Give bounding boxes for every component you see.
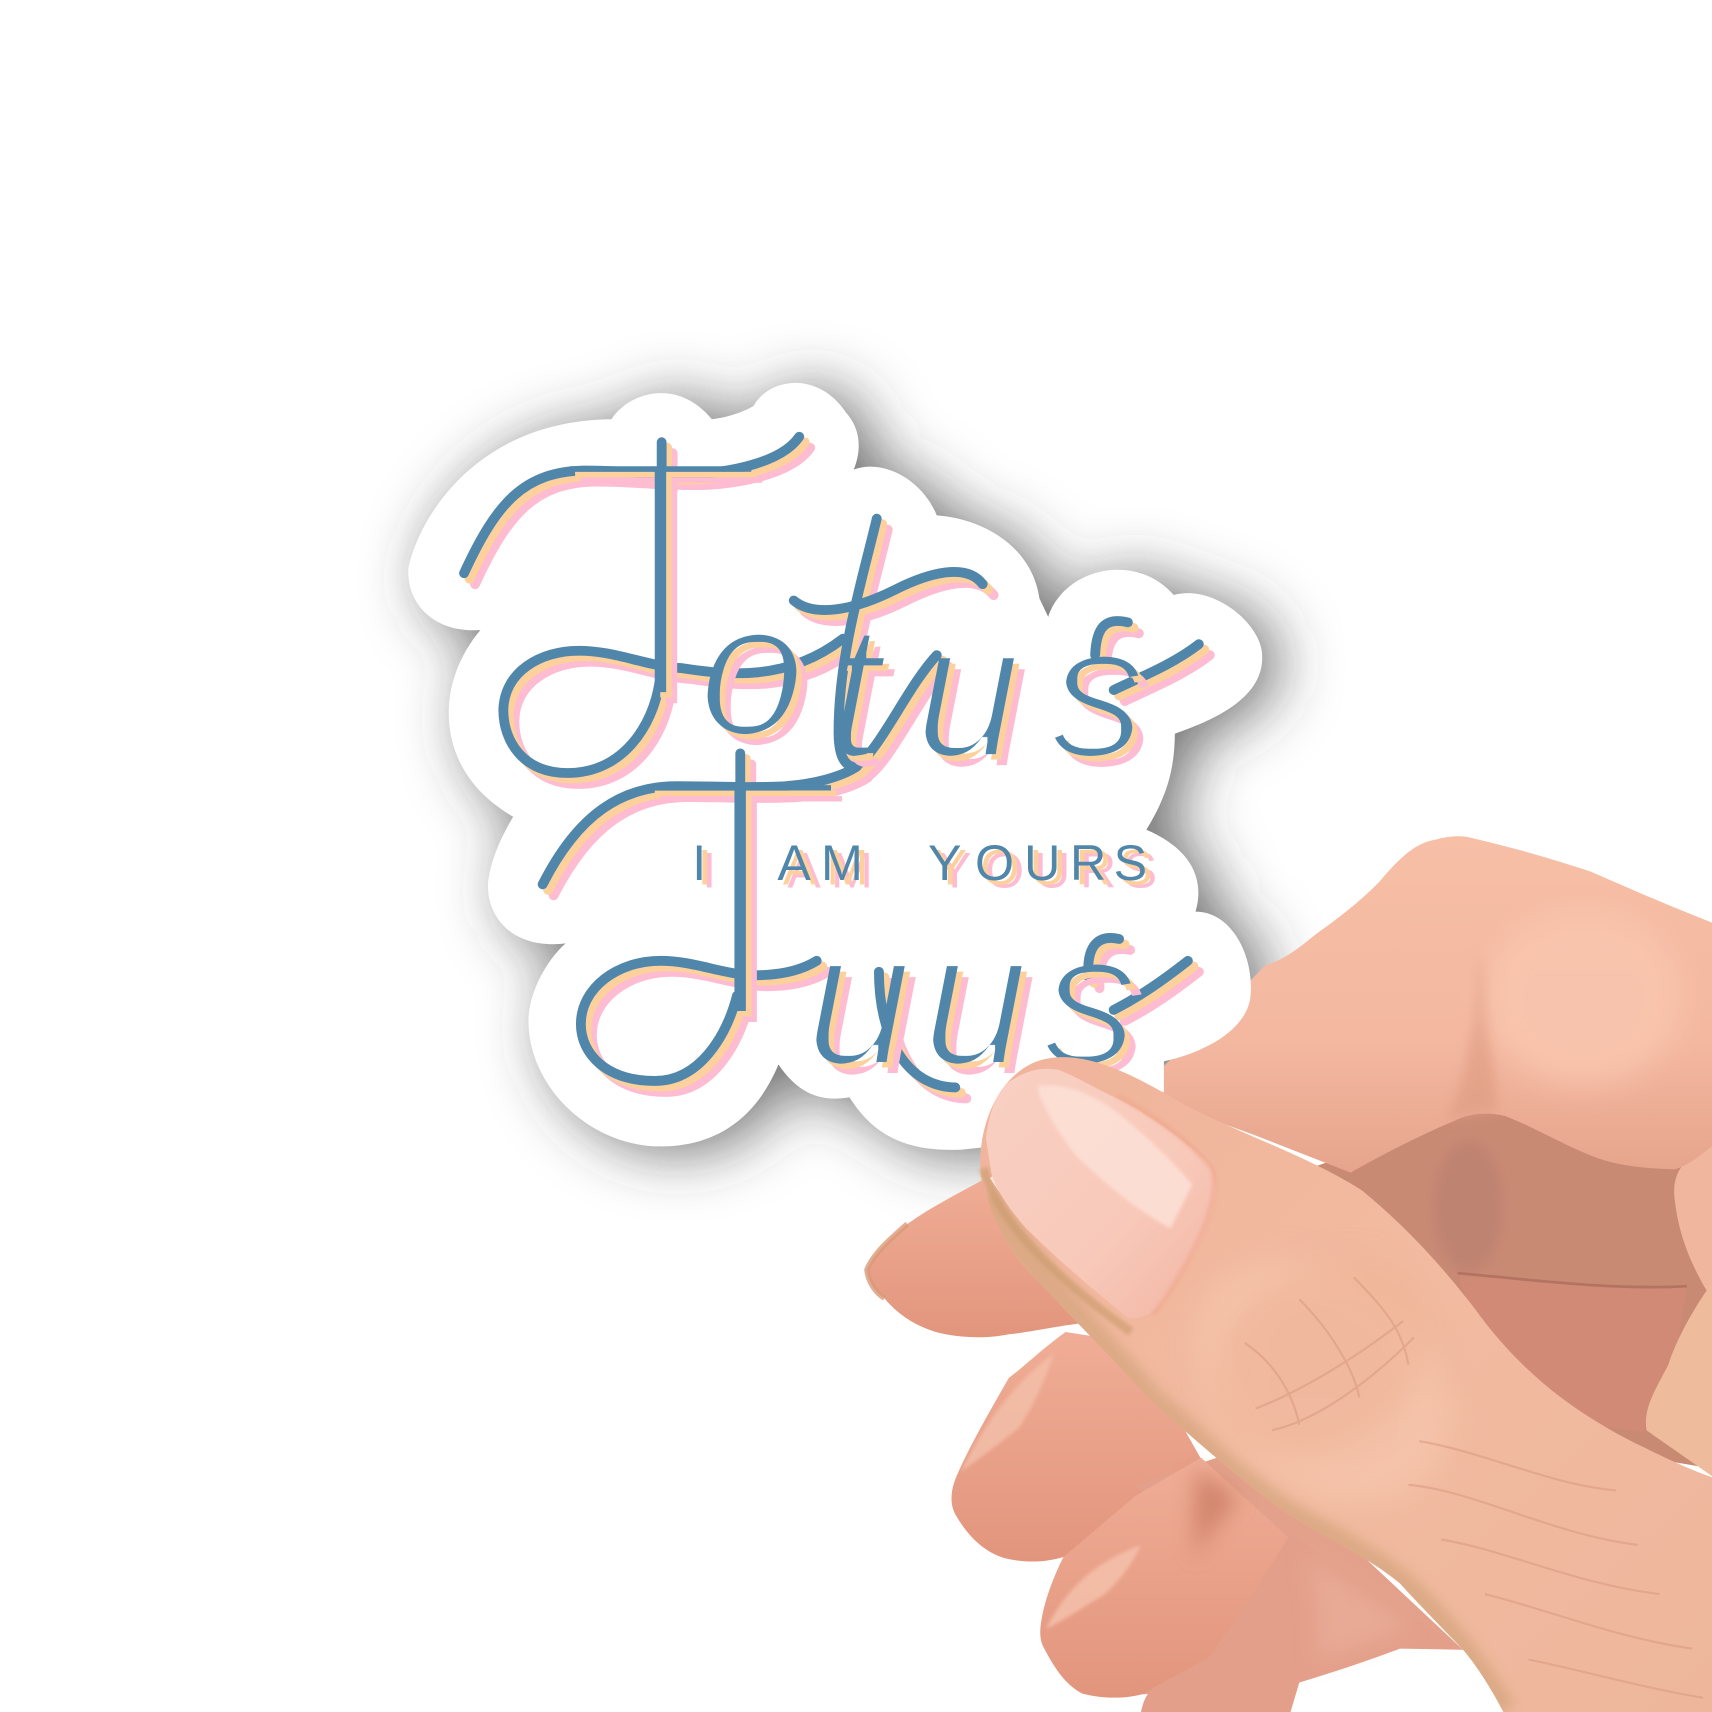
lettering: Totus: T bbox=[551, 378, 771, 780]
thumb base bbox=[980, 1057, 1712, 1712]
back fingertip left bbox=[867, 1177, 1081, 1337]
nail cuticle tint bbox=[1117, 1095, 1214, 1315]
lettering: Tuus bbox=[630, 697, 1138, 1106]
second finger bbox=[952, 1332, 1206, 1562]
index finger back bbox=[1136, 836, 1712, 1173]
swash flourishes bbox=[464, 437, 1199, 1087]
pad highlight bbox=[1202, 1272, 1438, 1490]
crease between fingers bbox=[1458, 1273, 1687, 1287]
nail rim shadow bbox=[984, 1168, 1131, 1332]
thumb shading bbox=[986, 1196, 1703, 1712]
index finger crease shade bbox=[1447, 950, 1498, 1119]
right edge finger bbox=[1674, 1146, 1712, 1299]
lettering: Tuus: T bbox=[630, 697, 850, 1099]
lower right finger bbox=[1646, 1283, 1712, 1476]
nail bbox=[986, 1069, 1216, 1318]
fingertip edge shade bbox=[867, 1224, 907, 1298]
palm highlight bbox=[1305, 1556, 1414, 1662]
dark gap between fingers bbox=[1194, 1469, 1239, 1559]
hand: thumb in front of sticker bbox=[980, 1057, 1712, 1712]
lettering: Totus: otus bbox=[699, 563, 1146, 798]
nail side edge bbox=[991, 1177, 1129, 1315]
index finger highlight bbox=[1485, 912, 1681, 1086]
nail gloss band bbox=[1037, 1085, 1192, 1228]
lettering: Totus bbox=[551, 378, 1146, 798]
lettering: I AM YOURS: I AM YOURS bbox=[692, 835, 1147, 891]
third finger bbox=[1040, 1458, 1291, 1698]
knuckle fold bbox=[1434, 1141, 1503, 1272]
warm edge along the underside bbox=[986, 1196, 1503, 1712]
third finger nail bbox=[1046, 1545, 1141, 1629]
sticker drop shadow bbox=[425, 388, 1279, 1155]
knuckle wrinkles bbox=[1245, 1277, 1703, 1698]
little finger and palm bbox=[1141, 1534, 1463, 1712]
sticker die-cut bbox=[408, 383, 1262, 1150]
sticker mockup scene bbox=[382, 346, 1712, 1712]
fingerprint pad tint bbox=[1221, 1275, 1419, 1452]
palm shade between fingers bbox=[1136, 1452, 1463, 1695]
second finger nail bbox=[961, 1354, 1054, 1472]
lettering: Tuus: uus bbox=[806, 893, 1138, 1106]
hand: back fingers and palm bbox=[867, 836, 1712, 1712]
lower dark finger gap bbox=[1458, 1273, 1687, 1432]
right dark fingers area bbox=[1310, 1103, 1712, 1469]
